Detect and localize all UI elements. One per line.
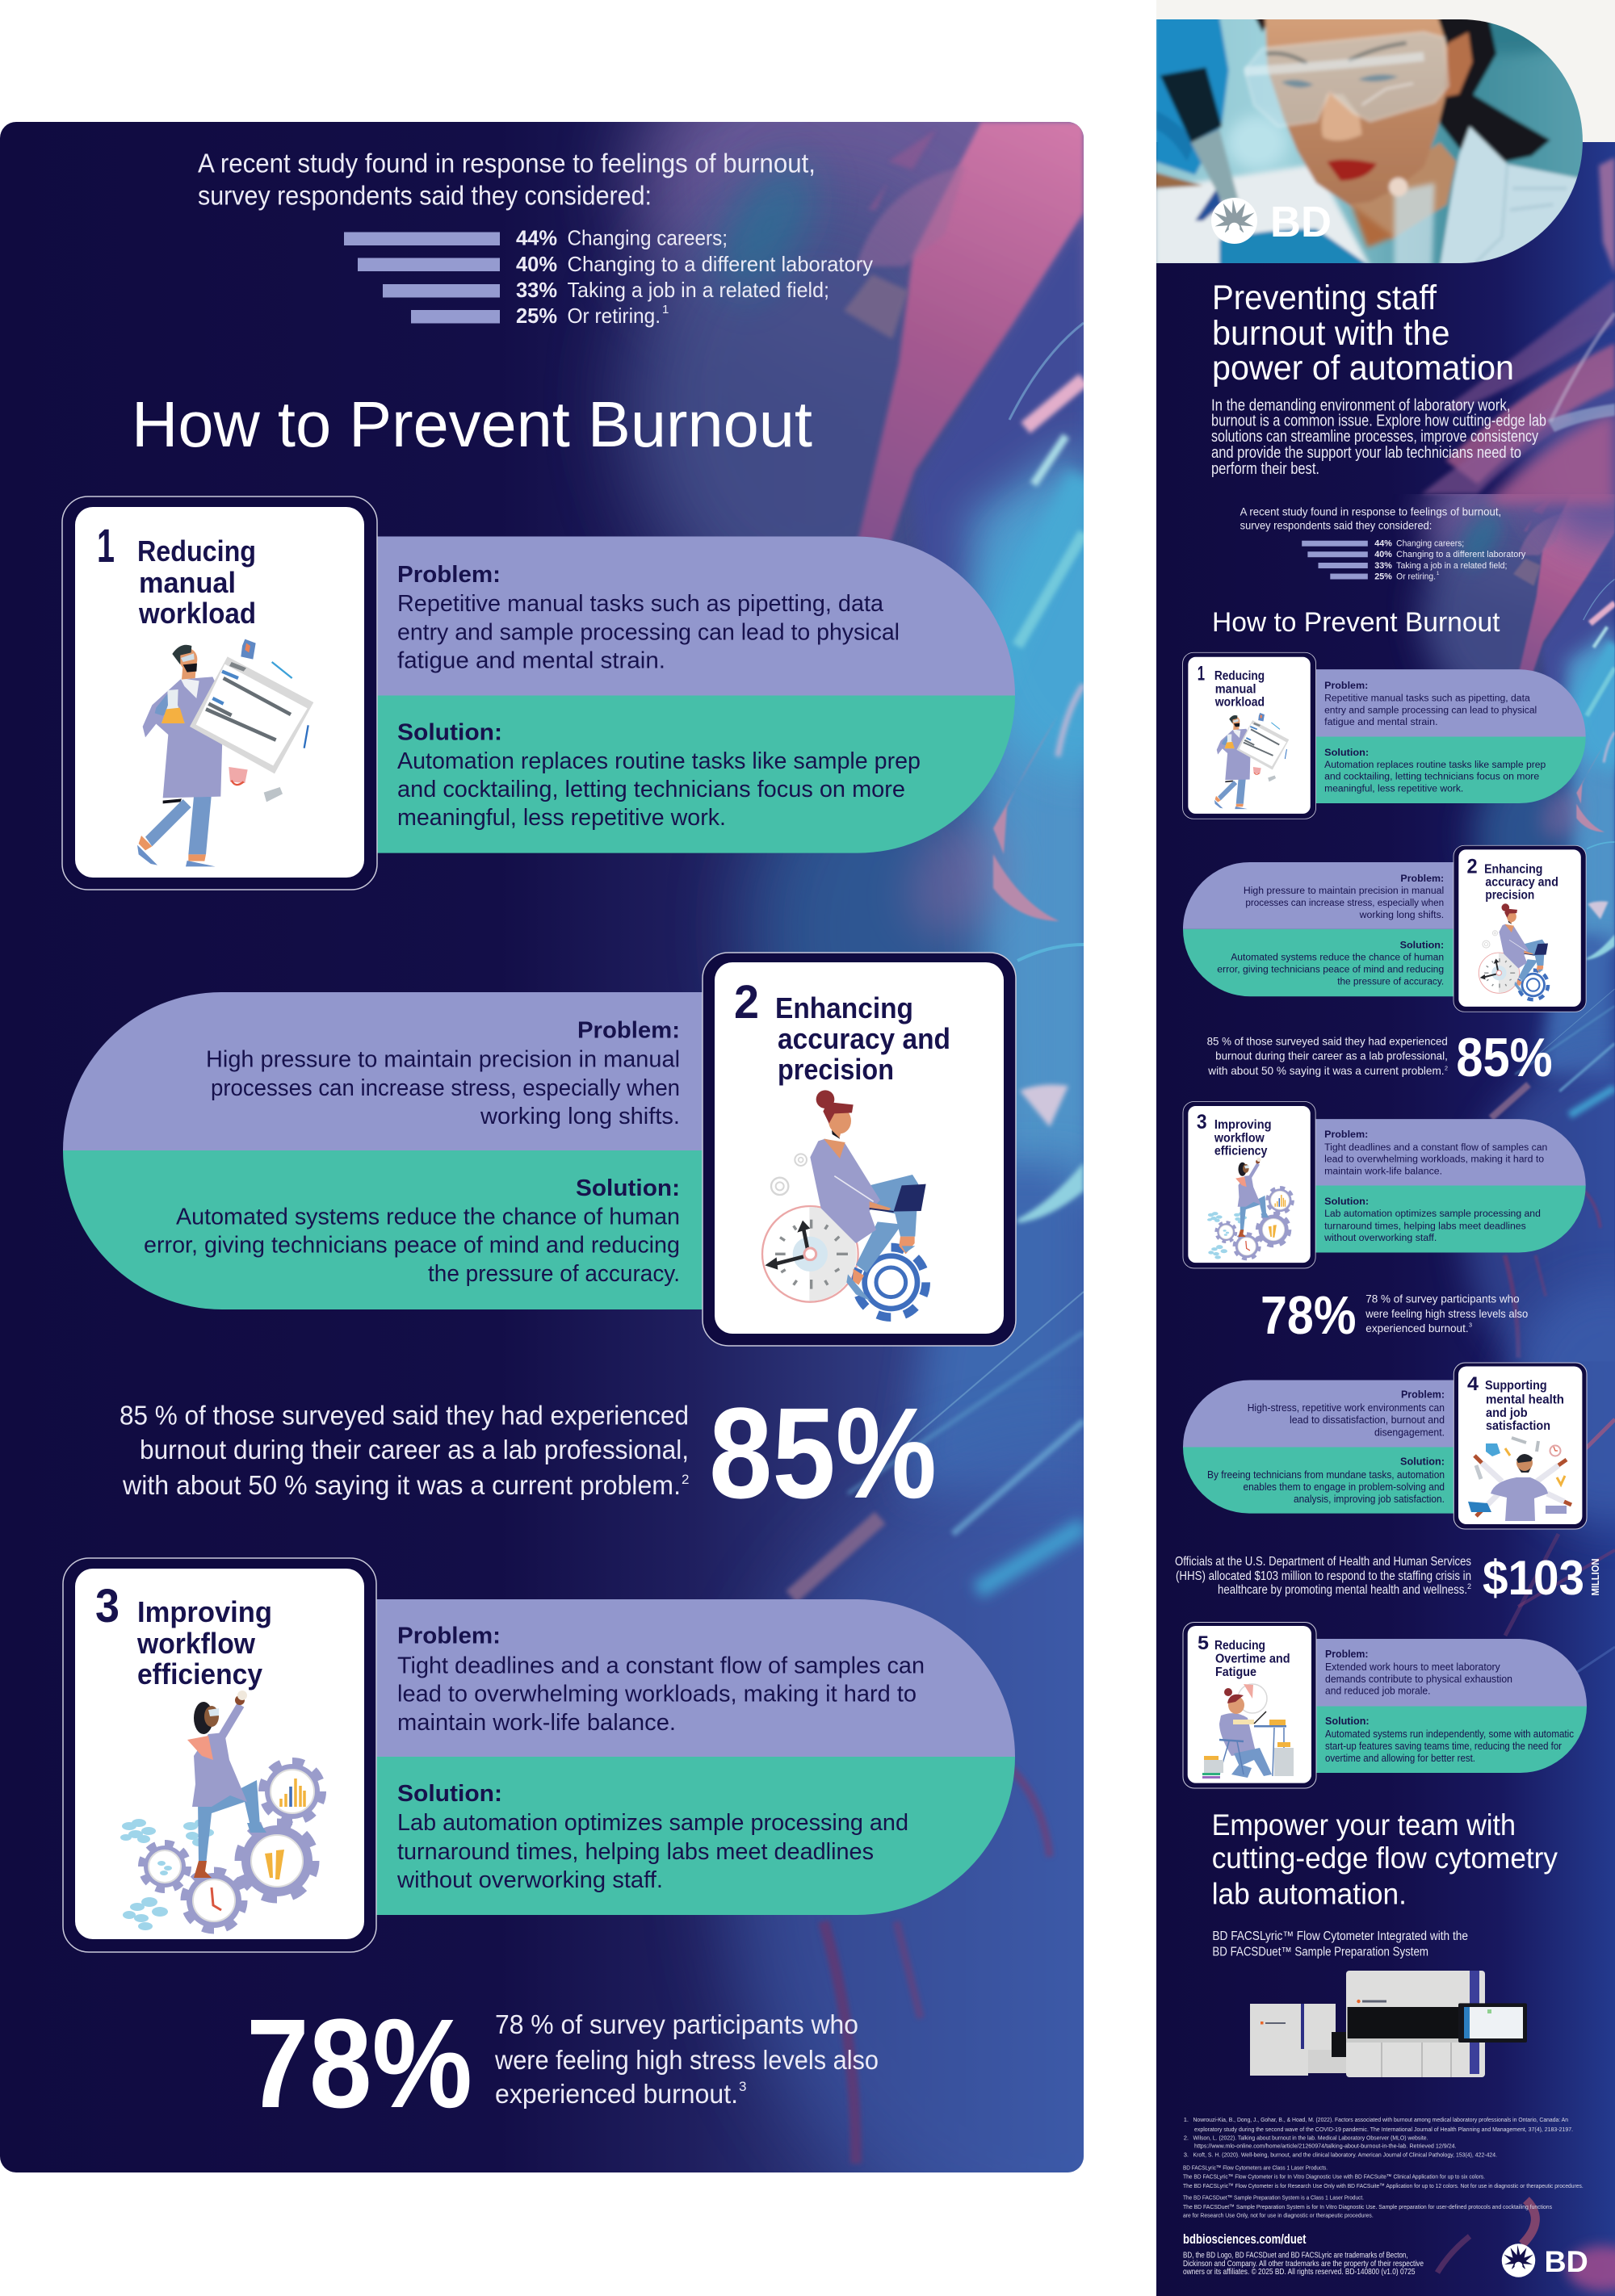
mini card 3: workflow <box>1214 1131 1265 1145</box>
footnotes and references: The BD FACSLyric™ Flow Cytometer is for In Vitro Diagnostic Use with BD FACSuite™ Clinical Application for up to six colors. <box>1183 2173 1485 2181</box>
mini card 1: Solution: <box>1324 747 1369 758</box>
footnotes and references: Kroft, S. H. (2020). Well-being, burnout, and the clinical laboratory. American Journal of Clinical Pathology, 153(4), 422-424. <box>1193 2151 1497 2158</box>
footnotes and references <box>1183 2116 1584 2218</box>
mini intro text: survey respondents said they considered: <box>1240 518 1432 531</box>
card 5: reducing overtime and fatigue: Automated systems run independently, some with automatic <box>1325 1728 1574 1740</box>
mini stat 78 percent: were feeling high stress levels also <box>1365 1307 1528 1320</box>
mini card 2: precision <box>1485 889 1534 903</box>
card 3: improving workflow efficiency <box>63 1558 1015 1952</box>
mini card 1: Repetitive manual tasks such as pipetting, data <box>1324 692 1530 703</box>
mini card 3: Improving <box>1214 1118 1272 1132</box>
mini intro text <box>1240 505 1501 531</box>
mini card 2: accuracy and <box>1485 876 1558 890</box>
stat: 78 percent: were feeling high stress levels also <box>494 2045 879 2075</box>
intro paragraph: solutions can streamline processes, improve consistency <box>1211 428 1538 446</box>
main title: burnout with the <box>1212 314 1450 353</box>
mini stat 85 percent: with about 50 % saying it was a current problem. <box>1207 1064 1445 1077</box>
bar chart: burnout responses: 1 <box>662 303 669 316</box>
illustration card 4 <box>1454 1363 1587 1529</box>
product caption <box>1212 1929 1468 1959</box>
mini card 3: Problem: <box>1324 1129 1368 1140</box>
bar chart: burnout responses: Taking a job in a related field; <box>567 278 829 302</box>
mini bar chart: Or retiring. <box>1396 572 1436 581</box>
mini card 3 <box>1183 1101 1586 1268</box>
card 4: supporting mental health and job satisfaction: lead to dissatisfaction, burnout and <box>1290 1414 1445 1426</box>
illustration card: efficiency <box>137 1657 262 1691</box>
illustration card <box>703 953 1016 1346</box>
mini card 2: Problem: <box>1400 873 1444 884</box>
mini stat 85 percent <box>1207 1028 1553 1088</box>
card 4: supporting mental health and job satisfaction: Problem: <box>1401 1389 1445 1400</box>
stat: 85 percent: 85 % of those surveyed said they had experienced <box>120 1400 689 1431</box>
mini card 1: and cocktailing, letting technicians focus on more <box>1324 771 1539 782</box>
footnotes and references: Nowrouzi-Kia, B., Dong, J., Gohar, B., & Hoad, M. (2022). Factors associated with burnout among medical laboratory professionals in Ontario, Canada: An <box>1193 2116 1568 2123</box>
trademark notice: owners or its affiliates. © 2025 BD. All rights reserved. BD-140800 (v1.0) 0725 <box>1183 2268 1416 2277</box>
card 5: reducing overtime and fatigue: and reduced job morale. <box>1325 1686 1431 1697</box>
problem and solution pill: Solution: <box>397 720 502 746</box>
photo: scientist with safety goggles <box>1155 16 1591 266</box>
mini bar chart: Taking a job in a related field; <box>1396 561 1507 571</box>
stat: 78 percent: 78% <box>246 1993 472 2135</box>
mini stat 85 percent: 85% <box>1456 1028 1553 1088</box>
problem and solution pill: working long shifts. <box>480 1104 680 1129</box>
mini bar chart: Changing careers; <box>1396 538 1464 548</box>
stat: 103 million dollars: $103 <box>1483 1551 1584 1605</box>
mini bar chart: 1 <box>1437 571 1440 576</box>
footnotes and references: are for Research Use Only, not for use in diagnostic or therapeutic procedures. <box>1183 2212 1374 2218</box>
illustration card 4: Supporting <box>1485 1379 1547 1393</box>
problem and solution pill <box>376 1599 1015 1915</box>
footnotes and references: 2. <box>1184 2135 1189 2141</box>
problem and solution pill: Automation replaces routine tasks like sample prep <box>397 748 921 774</box>
problem and solution pill: error, giving technicians peace of mind and reducing <box>144 1232 680 1258</box>
problem and solution pill <box>376 536 1015 853</box>
mini card 3: Solution: <box>1324 1196 1369 1207</box>
card 4: supporting mental health and job satisfaction: High-stress, repetitive work environments can <box>1248 1402 1445 1414</box>
mini card 3: lead to overwhelming workloads, making it hard to <box>1324 1154 1544 1165</box>
mini card 2: 2 <box>1467 857 1478 878</box>
stat: 103 million dollars: MILLION <box>1590 1558 1601 1595</box>
problem and solution pill: Solution: <box>576 1175 680 1201</box>
illustration card 5: 5 <box>1198 1632 1209 1654</box>
intro paragraph: perform their best. <box>1211 460 1319 478</box>
product caption: BD FACSDuet™ Sample Preparation System <box>1212 1946 1428 1959</box>
problem and solution pill: maintain work-life balance. <box>397 1710 676 1736</box>
footnotes and references: 1. <box>1184 2116 1189 2123</box>
mini card 2: Enhancing <box>1484 863 1542 877</box>
closing heading: empower your team <box>1212 1808 1558 1910</box>
mini card 3: Lab automation optimizes sample processing and <box>1324 1208 1541 1219</box>
stat: 78 percent: experienced burnout. <box>495 2079 738 2109</box>
top off-white band <box>1156 0 1615 142</box>
illustration card: precision <box>778 1053 894 1086</box>
bar chart: burnout responses: Or retiring. <box>567 304 661 328</box>
trademark notice: Dickinson and Company. All other trademarks are the property of their respective <box>1183 2260 1424 2269</box>
footnotes and references: The BD FACSDuet™ Sample Preparation System is for In Vitro Diagnostic Use. Sample preparation for user-defined protocols and cocktailing functions <box>1183 2203 1552 2210</box>
illustration card: manual <box>139 566 236 599</box>
closing heading: empower your team: Empower your team with <box>1212 1808 1516 1841</box>
bar chart: burnout responses: 33% <box>516 278 557 302</box>
intro paragraph: and provide the support your lab technicians need to <box>1211 444 1521 462</box>
problem and solution pill: Problem: <box>577 1017 680 1043</box>
mini stat 78 percent: 78% <box>1261 1286 1356 1346</box>
mini card 1: entry and sample processing can lead to physical <box>1324 704 1537 715</box>
mini card 1: workload <box>1214 696 1265 710</box>
mini card 1: Automation replaces routine tasks like sample prep <box>1324 759 1546 770</box>
mini card 2: Automated systems reduce the chance of human <box>1231 952 1444 963</box>
problem and solution pill: lead to overwhelming workloads, making it hard to <box>397 1681 917 1707</box>
mini card 3: Tight deadlines and a constant flow of samples can <box>1324 1142 1548 1153</box>
mini card 2: Solution: <box>1400 940 1444 951</box>
stat: 103 million dollars: (HHS) allocated $103 million to respond to the staffing crisis in <box>1176 1569 1471 1583</box>
mini card 3: maintain work-life balance. <box>1324 1166 1442 1177</box>
mini bar chart: Changing to a different laboratory <box>1396 550 1526 559</box>
bar chart: burnout responses <box>344 226 873 328</box>
logo: BD footer: BD <box>1544 2245 1588 2278</box>
stat: 78 percent: 78 % of survey participants who <box>495 2009 858 2039</box>
logo: BD on photo <box>1211 198 1332 246</box>
mini card 1: manual <box>1215 683 1256 697</box>
mini card 1: fatigue and mental strain. <box>1324 716 1438 727</box>
trademark notice <box>1183 2251 1424 2277</box>
footnotes and references: The BD FACSDuet™ Sample Preparation System is a Class 1 Laser Product. <box>1183 2194 1364 2202</box>
card 5: reducing overtime and fatigue <box>1183 1623 1587 1788</box>
mini bar chart <box>1302 538 1526 581</box>
bar chart: burnout responses: Changing to a different laboratory <box>567 252 873 276</box>
mini card 2 <box>1183 845 1586 1012</box>
mini heading: How to Prevent Burnout <box>1212 607 1500 638</box>
problem and solution pill: Repetitive manual tasks such as pipetting, data <box>397 591 884 617</box>
heading: how to prevent burnout: How to Prevent Burnout <box>132 388 812 460</box>
mini bar chart: 25% <box>1374 572 1392 581</box>
logo: BD on photo: BD <box>1270 198 1332 246</box>
mini card 1 <box>1183 652 1586 819</box>
logo: BD footer <box>1502 2244 1588 2278</box>
mini card 1: Reducing <box>1214 669 1265 683</box>
intro text <box>198 149 816 210</box>
mini card 2: working long shifts. <box>1359 909 1444 920</box>
mini card 1: meaningful, less repetitive work. <box>1324 782 1463 794</box>
illustration card: Improving <box>137 1595 272 1628</box>
mini intro text: A recent study found in response to feelings of burnout, <box>1240 505 1501 517</box>
closing heading: empower your team: cutting-edge flow cytometry <box>1212 1841 1558 1875</box>
card 4: supporting mental health and job satisfaction: Solution: <box>1400 1456 1445 1468</box>
footnotes and references: BD FACSLyric™ Flow Cytometers are Class 1 Laser Products. <box>1183 2164 1328 2172</box>
footnotes and references: https://www.mlo-online.com/home/article/21260974/talking-about-burnout-in-the-lab. Retrieved 12/9/24. <box>1194 2143 1457 2150</box>
illustration card 4: mental health <box>1486 1393 1564 1406</box>
right column background artwork <box>1156 142 1615 2296</box>
stat: 103 million dollars <box>1175 1551 1601 1605</box>
mini bar chart: 40% <box>1374 550 1392 559</box>
card 2: enhancing accuracy and precision <box>63 953 1016 1346</box>
card 4: supporting mental health and job satisfaction <box>1183 1363 1587 1529</box>
stat: 85 percent: burnout during their career as a lab professional, <box>140 1435 689 1464</box>
problem and solution pill: entry and sample processing can lead to physical <box>397 620 900 646</box>
mini card 2: High pressure to maintain precision in manual <box>1244 885 1444 896</box>
mini stat 78 percent: 3 <box>1469 1322 1472 1329</box>
mini stat 85 percent: burnout during their career as a lab professional, <box>1215 1049 1448 1062</box>
mini stat 85 percent: 85 % of those surveyed said they had experienced <box>1207 1034 1448 1047</box>
mini stat 78 percent: experienced burnout. <box>1365 1322 1469 1334</box>
problem and solution pill: turnaround times, helping labs meet deadlines <box>397 1839 874 1865</box>
intro paragraph <box>1211 397 1546 478</box>
problem and solution pill: meaningful, less repetitive work. <box>397 805 726 831</box>
mini stat 85 percent: 2 <box>1445 1065 1448 1072</box>
stat: 85 percent: with about 50 % saying it was a current problem. <box>122 1470 681 1500</box>
mini card 3: efficiency <box>1214 1144 1268 1158</box>
intro paragraph: burnout is a common issue. Explore how cutting-edge lab <box>1211 412 1546 429</box>
mini card 1: Problem: <box>1324 680 1368 691</box>
card 5: reducing overtime and fatigue: Extended work hours to meet laboratory <box>1325 1661 1500 1673</box>
illustration card: 3 <box>95 1580 120 1632</box>
footnotes and references: exploratory study during the second wave of the COVID-19 pandemic. The International Journal of Health Planning and Management, 37(4), 2183-2197. <box>1194 2126 1573 2133</box>
problem and solution pill: Solution: <box>397 1781 502 1807</box>
stat: 103 million dollars: Officials at the U.S. Department of Health and Human Services <box>1175 1555 1471 1569</box>
illustration card: accuracy and <box>778 1022 950 1055</box>
footnotes and references: Wilson, L. (2022). Talking about burnout in the lab. Medical Laboratory Observer (MLO) website. <box>1193 2135 1428 2141</box>
illustration card 4: and job <box>1486 1406 1528 1420</box>
illustration card <box>62 496 377 890</box>
stat: 85 percent: 85% <box>709 1381 937 1525</box>
illustration card: workload <box>138 597 256 630</box>
illustration card: workflow <box>136 1627 256 1660</box>
stat: 103 million dollars: 2 <box>1467 1582 1471 1590</box>
bar chart: burnout responses: 44% <box>516 226 557 250</box>
mini card 3: without overworking staff. <box>1323 1232 1437 1243</box>
problem and solution pill: the pressure of accuracy. <box>428 1261 680 1287</box>
card 4: supporting mental health and job satisfaction: By freeing technicians from mundane tasks, automation <box>1207 1469 1445 1481</box>
mini card 2: processes can increase stress, especially when <box>1245 897 1444 908</box>
illustration card 4: 4 <box>1467 1373 1479 1395</box>
mini card 1: 1 <box>1198 664 1205 685</box>
mini card 2: error, giving technicians peace of mind and reducing <box>1217 963 1444 974</box>
problem and solution pill: processes can increase stress, especially when <box>211 1075 680 1101</box>
stat: 78 percent <box>246 1993 879 2135</box>
card 4: supporting mental health and job satisfaction: enables them to engage in problem-solving and <box>1244 1481 1445 1493</box>
closing heading: empower your team: lab automation. <box>1212 1877 1407 1910</box>
website url: bdbiosciences.com/duet <box>1183 2231 1307 2247</box>
problem and solution pill: Problem: <box>397 1623 501 1649</box>
footnotes and references: 3. <box>1184 2151 1189 2158</box>
mini card 3: turnaround times, helping labs meet deadlines <box>1324 1220 1526 1231</box>
mini bar chart: 44% <box>1374 538 1392 548</box>
mini stat 78 percent <box>1261 1286 1528 1346</box>
problem and solution pill: without overworking staff. <box>396 1867 663 1893</box>
card 5: reducing overtime and fatigue: start-up features saving teams time, reducing the need for <box>1325 1741 1562 1752</box>
mini stat 78 percent: 78 % of survey participants who <box>1365 1293 1520 1305</box>
illustration card 5: Overtime and <box>1215 1652 1290 1666</box>
card 5: reducing overtime and fatigue: overtime and allowing for better rest. <box>1325 1753 1475 1764</box>
problem and solution pill: High pressure to maintain precision in manual <box>206 1046 680 1072</box>
main title: Preventing staff <box>1212 279 1437 317</box>
problem and solution pill <box>63 992 703 1309</box>
illustration card 4: satisfaction <box>1486 1419 1550 1433</box>
panel: how to prevent burnout (large version) <box>0 122 1084 2172</box>
stat: 85 percent: 2 <box>682 1472 689 1487</box>
card 1: reducing manual workload <box>62 496 1015 890</box>
problem and solution pill: Automated systems reduce the chance of human <box>176 1205 680 1230</box>
panel: right column full infographic <box>1155 0 1615 2296</box>
stat: 85 percent <box>120 1381 937 1525</box>
bar chart: burnout responses: 40% <box>516 252 557 276</box>
trademark notice: BD, the BD Logo, BD FACSDuet and BD FACSLyric are trademarks of Becton, <box>1183 2251 1408 2260</box>
card 5: reducing overtime and fatigue: Solution: <box>1325 1716 1370 1727</box>
problem and solution pill: Problem: <box>397 562 501 588</box>
mini card 2: the pressure of accuracy. <box>1337 975 1444 987</box>
bar chart: burnout responses: 25% <box>516 304 557 328</box>
card 4: supporting mental health and job satisfaction: analysis, improving job satisfaction. <box>1294 1494 1445 1505</box>
bar chart: burnout responses: Changing careers; <box>567 226 728 250</box>
illustration card: Enhancing <box>775 991 913 1024</box>
scaled copy: study, heading, cards 1 to 3 and stats <box>1183 505 1586 1346</box>
card 5: reducing overtime and fatigue: demands contribute to physical exhaustion <box>1325 1674 1512 1685</box>
stat: 78 percent: 3 <box>739 2079 746 2094</box>
illustration card <box>63 1558 376 1952</box>
illustration card: Reducing <box>137 534 256 568</box>
problem and solution pill: fatigue and mental strain. <box>397 647 665 673</box>
mini card 3: 3 <box>1197 1112 1207 1133</box>
card 5: reducing overtime and fatigue: Problem: <box>1325 1649 1368 1660</box>
problem and solution pill: and cocktailing, letting technicians focus on more <box>397 777 905 802</box>
illustration card: 2 <box>734 976 759 1029</box>
intro text: survey respondents said they considered: <box>198 181 652 210</box>
main title: power of automation <box>1212 349 1514 388</box>
intro text: A recent study found in response to feelings of burnout, <box>198 149 816 178</box>
illustration card 5: Fatigue <box>1215 1665 1256 1679</box>
intro paragraph: In the demanding environment of laboratory work, <box>1211 397 1510 415</box>
illustration card: 1 <box>97 520 115 572</box>
mini bar chart: 33% <box>1374 561 1392 571</box>
product caption: BD FACSLyric™ Flow Cytometer Integrated with the <box>1212 1929 1468 1943</box>
problem and solution pill: Tight deadlines and a constant flow of samples can <box>397 1653 925 1679</box>
card 4: supporting mental health and job satisfaction: disengagement. <box>1374 1427 1445 1439</box>
illustration card 5 <box>1183 1623 1316 1788</box>
main title <box>1212 279 1514 388</box>
stat: 103 million dollars: healthcare by promoting mental health and wellness. <box>1218 1583 1467 1597</box>
illustration card 5: Reducing <box>1214 1639 1265 1653</box>
product image: BD FACSLyric and FACSDuet instruments <box>1250 1971 1527 2077</box>
problem and solution pill: Lab automation optimizes sample processing and <box>397 1810 908 1836</box>
